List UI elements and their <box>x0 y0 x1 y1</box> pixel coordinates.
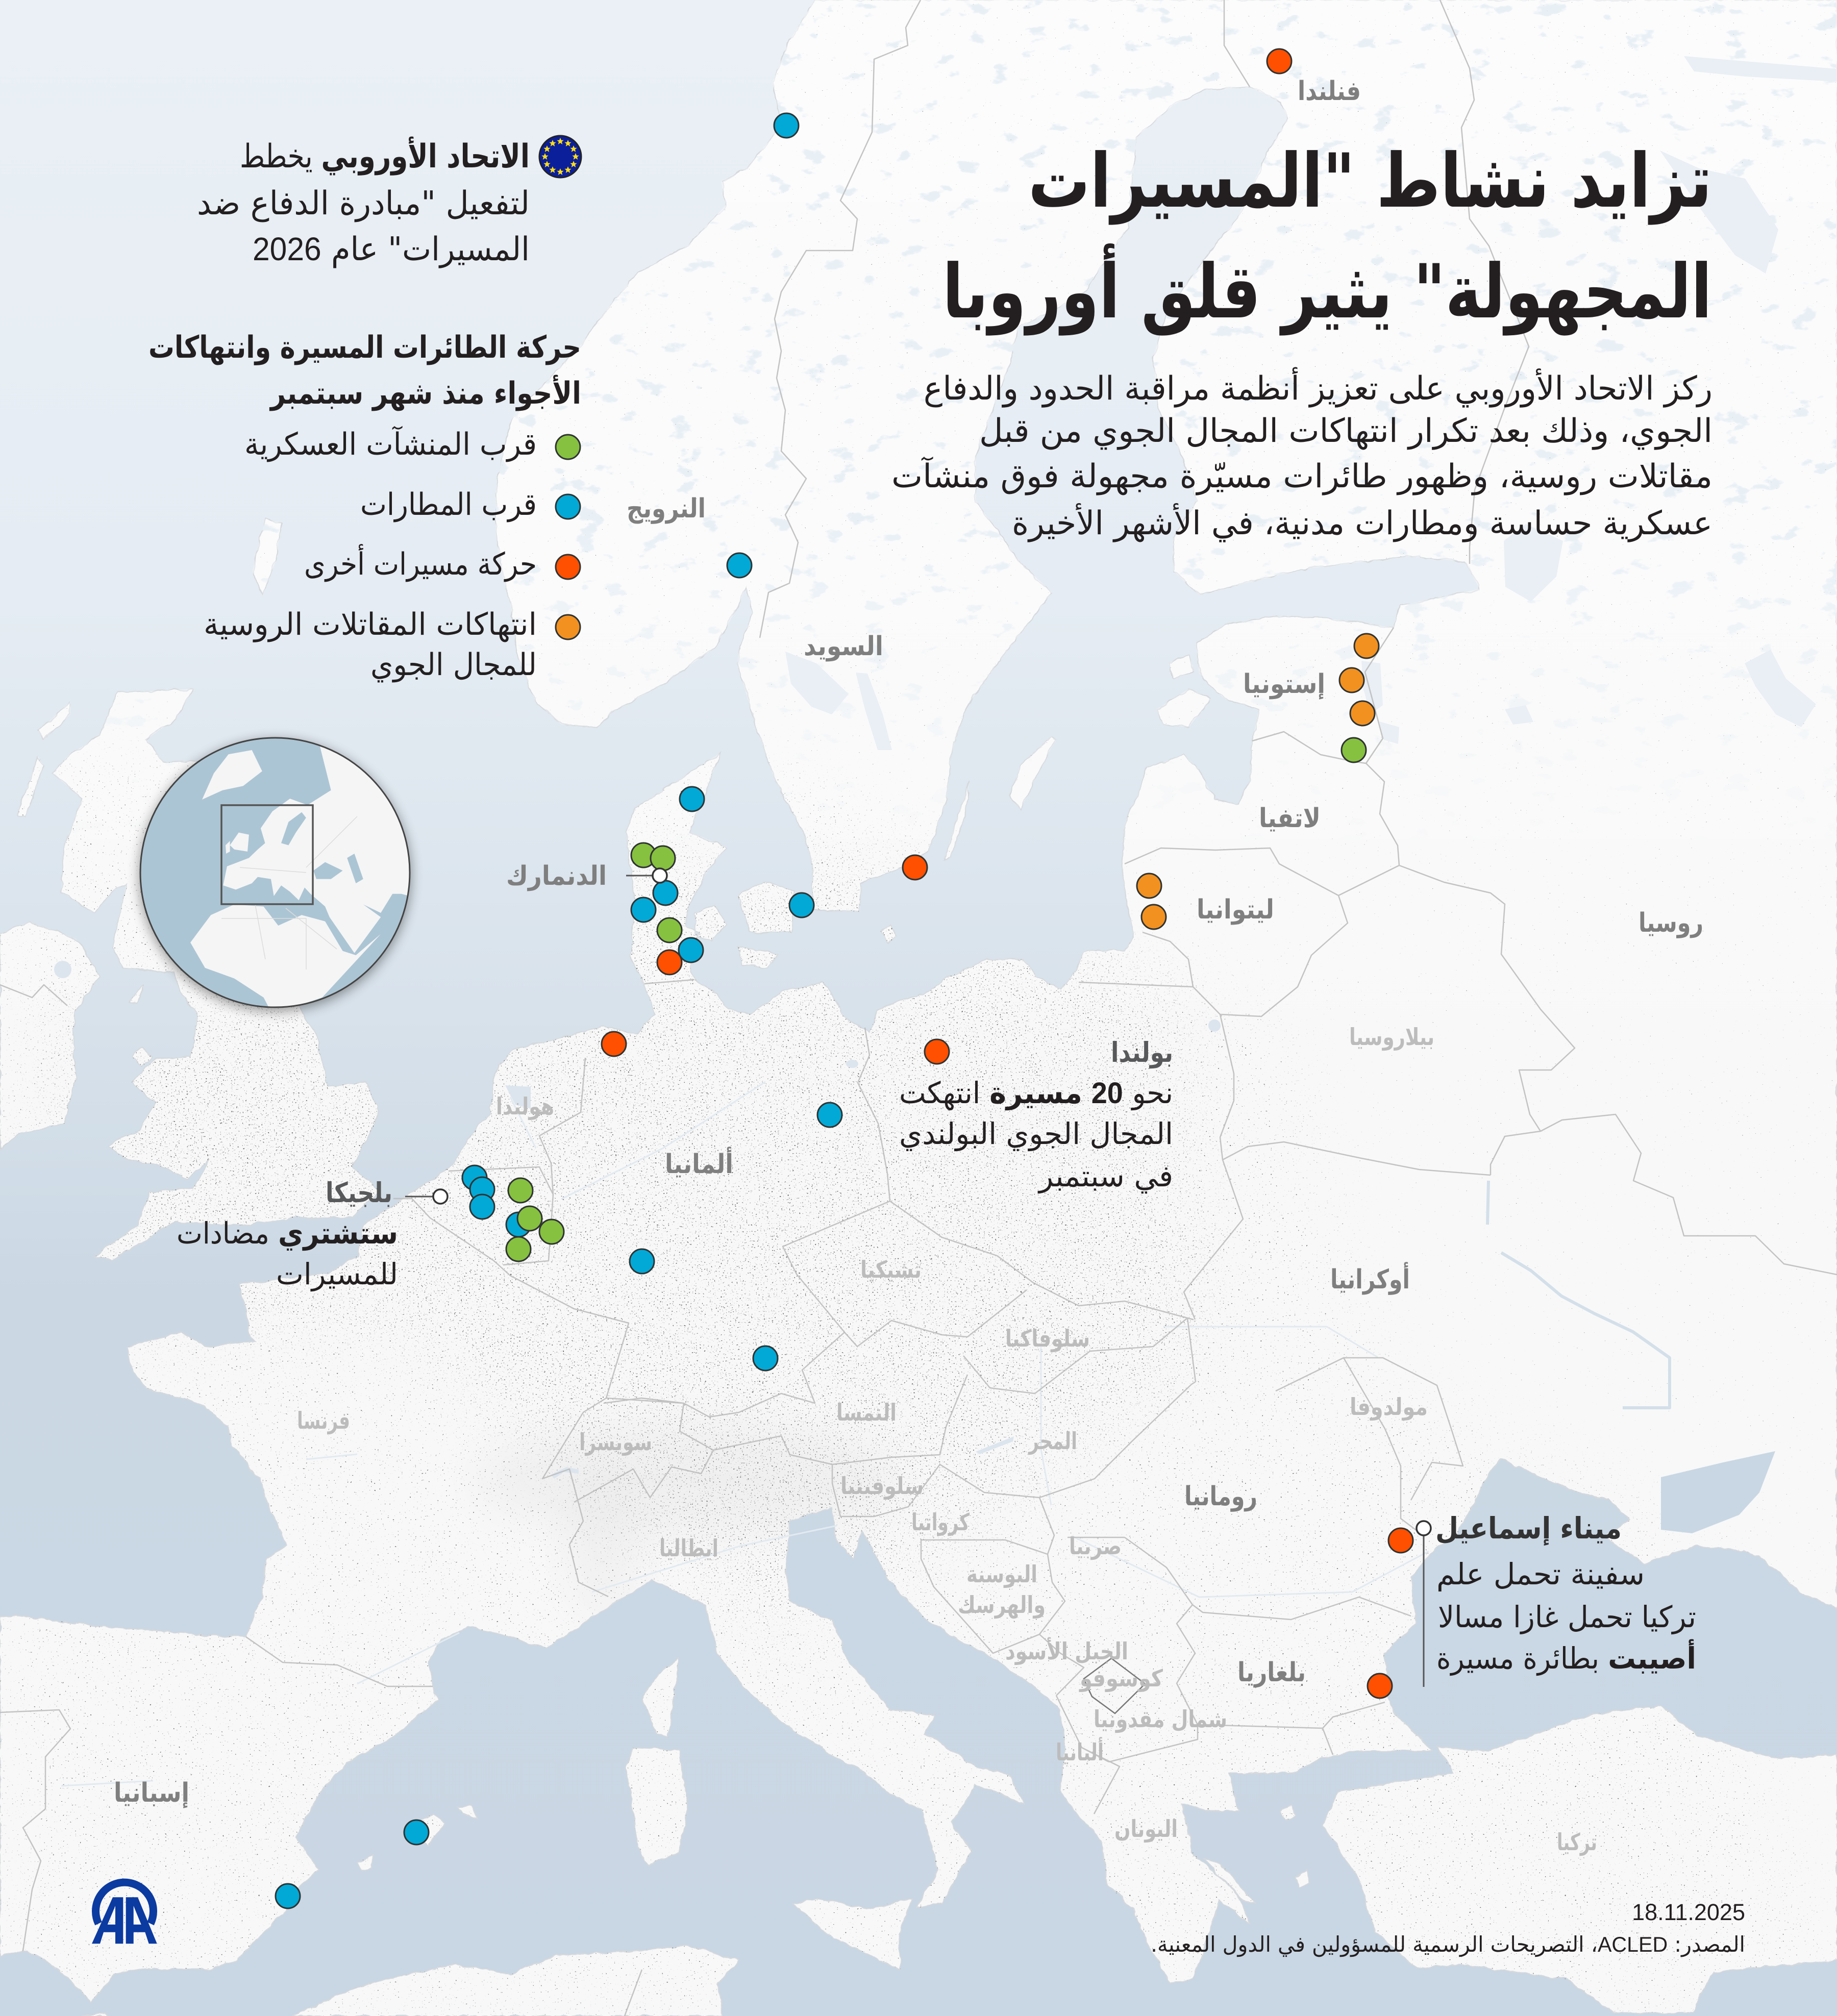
callout: Belgium: للمسيرات <box>276 1257 398 1292</box>
callout: Belgium: بلجيكا <box>326 1177 392 1209</box>
legend <box>148 330 581 683</box>
label: Denmark: الدنمارك <box>506 861 607 891</box>
legend heading <box>148 330 581 411</box>
legend item: military: قرب المنشآت العسكرية <box>244 426 537 462</box>
label: Kosovo: كوسوفو <box>1079 1664 1163 1692</box>
label: Moldova: مولدوفا <box>1350 1393 1428 1421</box>
label: Bulgaria: بلغاريا <box>1237 1657 1306 1688</box>
legend item: Russian fighters: انتهاكات المقاتلات الروسية <box>204 607 537 642</box>
legend item: Russian fighters: للمجال الجوي <box>370 647 537 683</box>
EU note text: المسيرات" عام 2026 <box>253 231 530 268</box>
callout: Poland: في سبتمبر <box>1037 1159 1173 1194</box>
legend item: Russian fighters <box>204 607 580 683</box>
country labels <box>114 76 1703 1856</box>
title <box>942 138 1712 336</box>
label: Montenegro: الجبل الأسود <box>1005 1637 1128 1665</box>
label: Ukraine: أوكرانيا <box>1330 1262 1410 1295</box>
label: Czechia: تشيكيا <box>860 1256 922 1283</box>
legend heading: الأجواء منذ شهر سبتمبر <box>269 375 581 411</box>
callout: Izmail port: تركيا تحمل غازا مسالا <box>1438 1600 1696 1635</box>
label: Serbia: صربيا <box>1069 1532 1122 1560</box>
icon: EU flag <box>539 136 581 178</box>
intro paragraph: ركز الاتحاد الأوروبي على تعزيز أنظمة مراقبة الحدود والدفاع <box>924 367 1712 408</box>
label: Netherlands: هولندا <box>496 1092 554 1120</box>
label: Italy: ايطاليا <box>659 1534 718 1562</box>
label: Slovenia: سلوفينيا <box>840 1472 924 1500</box>
label: North Macedonia: شمال مقدونيا <box>1094 1705 1227 1733</box>
source: المصدر: ACLED، التصريحات الرسمية للمسؤولين في الدول المعنية. <box>1151 1932 1745 1957</box>
event markers <box>276 49 1413 1908</box>
intro paragraph: مقاتلات روسية، وظهور طائرات مسيّرة مجهولة فوق منشآت <box>891 456 1712 495</box>
callout: Izmail port: أصيبت بطائرة مسيرة <box>1436 1639 1696 1676</box>
label: Turkey: تركيا <box>1557 1828 1597 1856</box>
callout: Poland: نحو 20 مسيرة انتهكت <box>899 1076 1173 1111</box>
callout: Izmail port: ميناء إسماعيل <box>1435 1511 1622 1546</box>
intro paragraph <box>891 367 1712 542</box>
label: Germany: ألمانيا <box>665 1147 733 1180</box>
legend item: other drones: حركة مسيرات أخرى <box>304 544 537 582</box>
label: Greece: اليونان <box>1114 1815 1178 1843</box>
callout: Izmail port <box>1417 1511 1696 1687</box>
callout: Poland <box>899 1036 1173 1194</box>
label: Bosnia: البوسنة <box>966 1560 1037 1588</box>
callout: Poland: المجال الجوي البولندي <box>899 1116 1173 1152</box>
EU note text: الاتحاد الأوروبي يخطط <box>240 136 530 176</box>
callout: Poland: بولندا <box>1111 1036 1173 1068</box>
icon: Anadolu Agency logo <box>92 1882 157 1944</box>
label: Slovakia: سلوفاكيا <box>1005 1325 1090 1352</box>
label: Russia: روسيا <box>1639 908 1703 938</box>
border: Kosovo <box>1084 1658 1145 1713</box>
label: Albania: ألبانيا <box>1056 1737 1104 1766</box>
legend item: airports: قرب المطارات <box>360 487 537 522</box>
intro paragraph: الجوي، وذلك بعد تكرار انتهاكات المجال الجوي من قبل <box>979 412 1712 450</box>
intro paragraph: عسكرية حساسة ومطارات مدنية، في الأشهر الأخيرة <box>1012 503 1712 542</box>
date: 18.11.2025 <box>1632 1899 1745 1925</box>
callout: Belgium <box>177 1177 448 1292</box>
callout: Belgium: ستشتري مضادات <box>177 1216 398 1251</box>
label: Finland: فنلندا <box>1298 76 1361 107</box>
label: Croatia: كرواتيا <box>911 1508 970 1536</box>
label: Norway: النرويج <box>627 493 706 524</box>
label: Romania: رومانيا <box>1184 1481 1257 1512</box>
label: Hungary: المجر <box>1028 1427 1077 1455</box>
label: Herzegovina: والهرسك <box>958 1591 1046 1619</box>
title: تزايد نشاط "المسيرات <box>1028 138 1712 225</box>
label: Estonia: إستونيا <box>1243 669 1325 700</box>
label: Austria: النمسا <box>836 1399 897 1426</box>
label: France: فرنسا <box>297 1407 350 1434</box>
label: Latvia: لاتفيا <box>1259 803 1321 834</box>
EU note text: لتفعيل "مبادرة الدفاع ضد <box>197 185 530 222</box>
legend heading: حركة الطائرات المسيرة وانتهاكات <box>148 330 581 365</box>
label: Lithuania: ليتوانيا <box>1197 894 1274 925</box>
callout: Izmail port: سفينة تحمل علم <box>1436 1557 1645 1591</box>
globe inset <box>139 738 425 1014</box>
callout: Denmark leader <box>626 868 667 883</box>
EU note text <box>197 136 530 268</box>
label: Belarus: بيلاروسيا <box>1349 1023 1434 1051</box>
label: Sweden: السويد <box>804 631 883 662</box>
label: Spain: إسبانيا <box>114 1778 189 1808</box>
label: Switzerland: سويسرا <box>579 1428 652 1456</box>
